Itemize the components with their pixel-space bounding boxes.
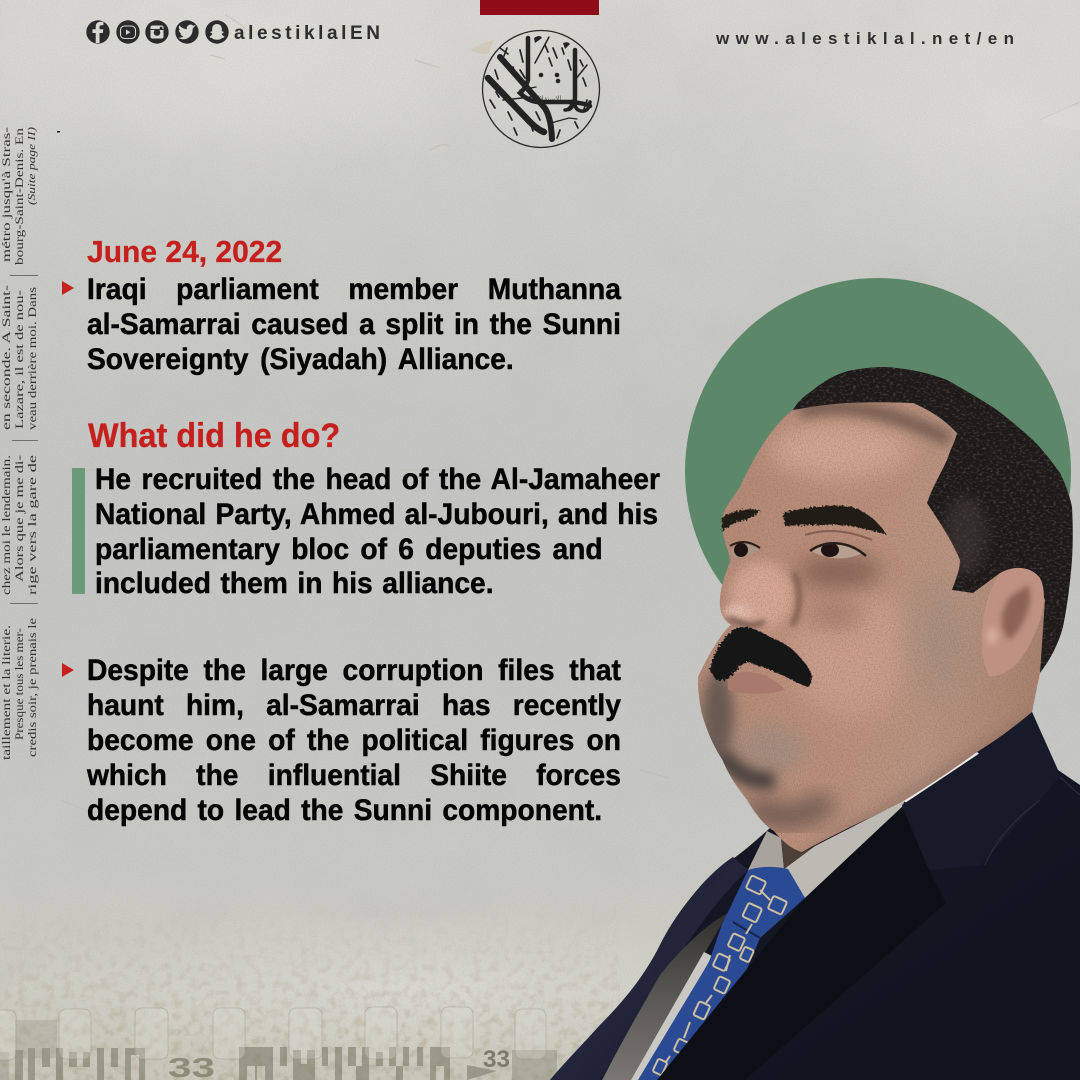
text block: first paragraph: Sovereignty (Siyadah) Alliance. xyxy=(87,343,514,376)
text block: recruitment paragraph: included them in his alliance. xyxy=(95,567,494,600)
website url: www.alestiklal.net/en xyxy=(715,29,1014,48)
lips xyxy=(728,672,785,694)
eye left xyxy=(730,542,760,558)
newspaper clipping text strip: métro jusqu'à Stras- xyxy=(1,127,13,262)
heading: date: June 24, 2022 xyxy=(87,234,282,269)
newspaper clipping text strip: Alors que je me di- xyxy=(14,455,26,582)
cheek light xyxy=(790,585,910,715)
suit left flap xyxy=(550,857,748,1080)
eyebrow left xyxy=(722,509,760,532)
newspaper clipping text strip: Lazare, il est de nou- xyxy=(14,290,26,429)
suit xyxy=(550,712,1080,1080)
film strip edge xyxy=(0,1006,557,1080)
green accent bar xyxy=(72,468,85,594)
heading: what did he do: What did he do? xyxy=(88,417,340,455)
text block: corruption paragraph: depend to lead the Sunni component. xyxy=(87,794,602,827)
text block: corruption paragraph xyxy=(86,654,622,827)
under-brow shadow xyxy=(798,554,882,590)
icon: facebook xyxy=(86,20,110,44)
text block: recruitment paragraph: He recruited the head of the Al-Jamaheer xyxy=(95,463,660,496)
moustache xyxy=(710,627,812,687)
text block: corruption paragraph: which the influential Shiite forces xyxy=(87,759,621,792)
ear xyxy=(981,568,1044,677)
hair xyxy=(793,367,1073,673)
icon: youtube xyxy=(116,20,140,44)
newspaper clipping text strip xyxy=(1,126,60,760)
eye right xyxy=(805,531,872,558)
upper collar xyxy=(902,712,1060,870)
text block: recruitment paragraph: National Party, Ahmed al-Jubouri, and his xyxy=(95,498,658,531)
jaw right stubble tone xyxy=(912,580,968,700)
forehead hairline shadow xyxy=(800,407,950,440)
newspaper clipping text strip: en seconde. A Saint- xyxy=(1,285,13,430)
logo: calligraphic seal: الاستقلال xyxy=(535,95,561,103)
newspaper clipping text strip: veau derrière moi. Dans xyxy=(27,286,39,430)
nose xyxy=(730,561,794,629)
newspaper clipping text strip: bourg-Saint-Denis. En xyxy=(14,128,26,265)
portrait with green circle xyxy=(550,278,1080,1080)
green circle xyxy=(685,278,1071,664)
icon: snapchat xyxy=(205,20,229,44)
newspaper clipping text strip: credis soir, je prenais le xyxy=(27,618,39,757)
newspaper clipping text strip: rige vers la gare de xyxy=(27,455,39,595)
red bullet arrow 2 xyxy=(62,663,74,677)
icon: instagram xyxy=(145,20,169,44)
top red tab xyxy=(480,0,599,15)
chin stubble xyxy=(702,670,734,770)
social handle: alestiklalEN xyxy=(234,23,380,44)
head xyxy=(698,367,1073,852)
shirt interior xyxy=(602,913,728,1080)
text block: first paragraph: Iraqi parliament member Muthanna xyxy=(87,273,621,306)
text block: corruption paragraph: Despite the large corruption files that xyxy=(87,654,621,687)
text block: corruption paragraph: become one of the political figures on xyxy=(87,724,621,757)
newspaper clipping text strip: (Suite page II) xyxy=(27,126,38,205)
text block: corruption paragraph: haunt him, al-Samarrai has recently xyxy=(87,689,621,722)
text block: recruitment paragraph xyxy=(95,463,660,600)
red bullet arrow 1 xyxy=(62,281,74,295)
face and neck xyxy=(698,395,1063,852)
newspaper clipping text strip: taillement et la literie. xyxy=(1,625,13,760)
text block: first paragraph: al-Samarrai caused a split in the Sunni xyxy=(87,308,621,341)
newspaper clipping text strip: chez moi le lendemain. xyxy=(1,455,13,595)
newspaper clipping text strip: Presque tous les mer- xyxy=(14,628,26,740)
tie xyxy=(638,867,805,1080)
text block: first paragraph xyxy=(87,273,622,376)
forehead highlight xyxy=(770,422,910,478)
shirt collar xyxy=(748,831,784,870)
icon: twitter xyxy=(175,20,199,44)
eyebrow right xyxy=(783,506,887,535)
logo: calligraphic seal xyxy=(482,30,600,148)
text block: recruitment paragraph: parliamentary bloc of 6 deputies and xyxy=(95,533,603,566)
social media icons xyxy=(86,20,229,44)
film strip edge: 33 xyxy=(483,1046,510,1073)
right lapel xyxy=(657,807,946,1080)
